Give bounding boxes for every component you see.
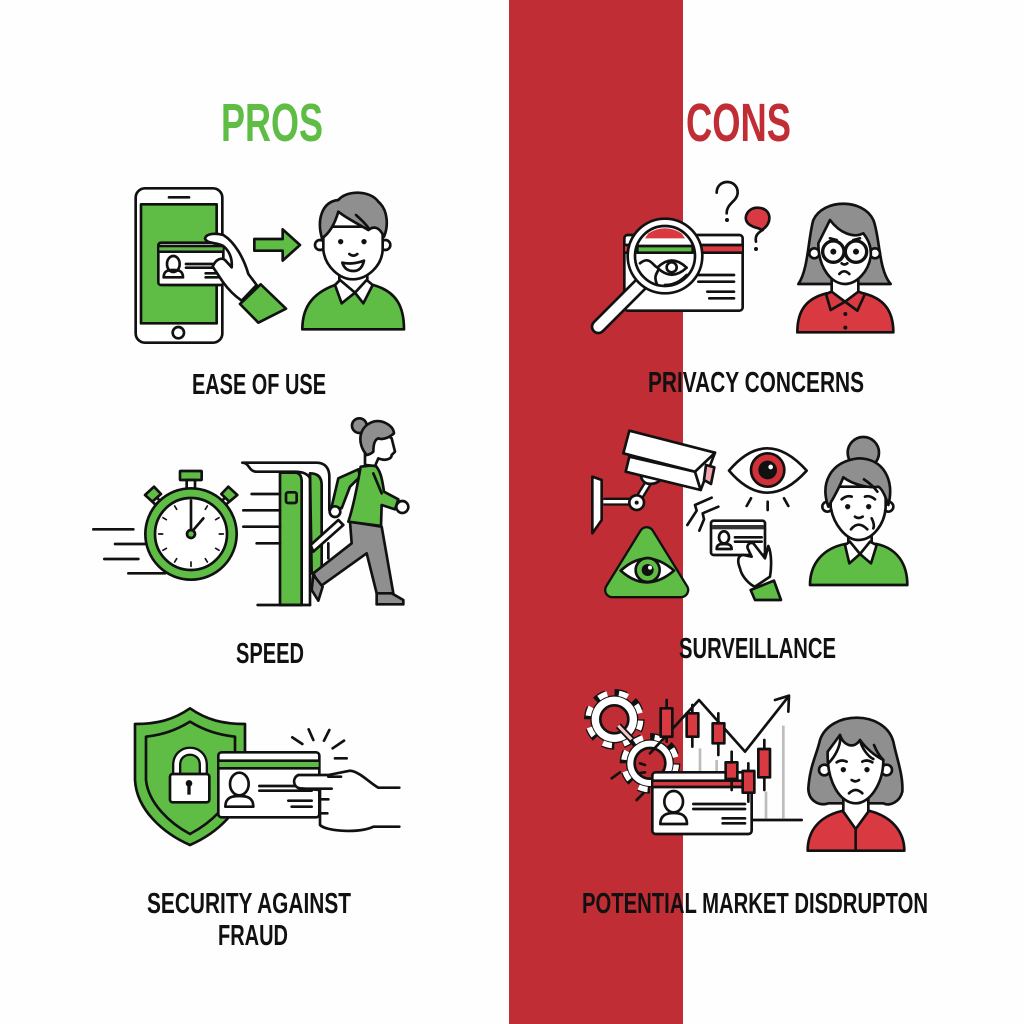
icon: worried woman with bun	[810, 437, 907, 585]
icon: gear large	[587, 692, 641, 746]
icon: hand holding card	[205, 234, 286, 323]
icon: smartphone	[136, 188, 222, 343]
icon: red eye	[729, 448, 807, 510]
icon group: security	[135, 708, 399, 845]
icon group: surveillance	[592, 431, 907, 600]
heading: cons: CONS	[686, 93, 791, 153]
icon: id card	[218, 752, 319, 817]
icon: sad woman	[808, 718, 904, 851]
red central band	[509, 0, 683, 1024]
icon: pointing hand	[294, 771, 399, 831]
icon: eye triangle	[612, 534, 681, 590]
icon: magnifying glass	[598, 219, 702, 327]
icon: question marks	[717, 182, 769, 251]
icon: hand holding card	[711, 521, 781, 600]
icon group: ease of use	[136, 188, 404, 343]
sparkle rays	[292, 729, 347, 758]
icon group: privacy concerns	[598, 182, 893, 332]
icon: worried woman with glasses	[797, 204, 893, 332]
icon: candlestick chart with arrow	[650, 696, 802, 820]
icon: arrow	[254, 229, 300, 261]
icon: id card	[652, 772, 752, 834]
candles over card	[726, 740, 770, 802]
label: privacy concerns: PRIVACY CONCERNS	[648, 367, 864, 399]
label: surveillance: SURVEILLANCE	[679, 633, 836, 665]
label: ease of use: EASE OF USE	[192, 369, 326, 401]
label: speed: SPEED	[236, 638, 304, 670]
motion lines	[93, 529, 165, 573]
icon: id card on phone	[158, 243, 223, 285]
icon: smiling man	[302, 193, 404, 329]
icon: shield with padlock	[135, 708, 245, 845]
icon: gear small	[612, 736, 677, 800]
heading: pros: PROS	[221, 93, 323, 153]
icon: stopwatch	[145, 471, 237, 580]
icon group: market disruption	[587, 692, 904, 851]
zigzag signals	[687, 498, 718, 531]
icon: id card	[624, 235, 743, 311]
icon: walking woman	[311, 418, 408, 604]
label: security against fraud: SECURITY AGAINST	[147, 888, 351, 920]
icon: security camera	[592, 431, 715, 533]
icon: turnstile gate	[242, 463, 329, 605]
label: security against fraud: FRAUD	[218, 920, 288, 952]
icon group: speed	[93, 418, 408, 605]
